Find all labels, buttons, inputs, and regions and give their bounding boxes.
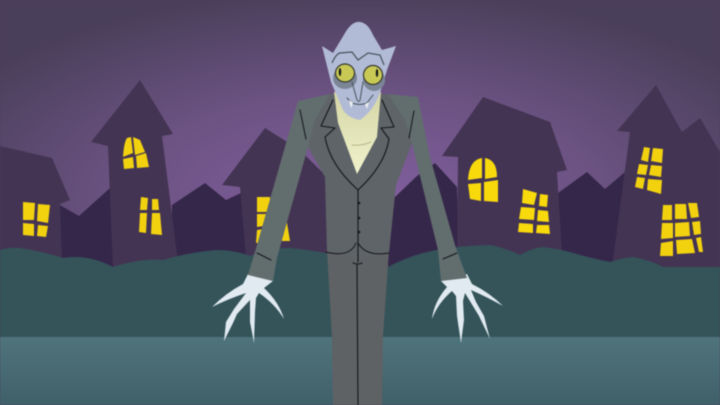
window: tower lower xyxy=(139,197,162,235)
house: behind left arm xyxy=(222,128,330,270)
house: far left xyxy=(0,146,70,262)
left hand xyxy=(212,274,284,343)
window: partly hidden xyxy=(256,197,290,243)
left arm xyxy=(248,94,330,281)
hedge row xyxy=(0,245,720,340)
ground xyxy=(0,337,720,405)
house: right centre xyxy=(442,97,567,270)
legs and trousers xyxy=(327,250,389,405)
window: left house xyxy=(23,202,50,237)
right hand xyxy=(432,274,503,343)
window: crooked panes xyxy=(518,189,550,234)
right eye xyxy=(364,66,382,84)
window: lower tower xyxy=(660,203,703,256)
right arm xyxy=(388,94,467,281)
house: tall tower xyxy=(91,80,179,270)
house: far right tower xyxy=(611,85,720,275)
head shape and ears xyxy=(322,22,396,120)
brow line xyxy=(332,52,384,65)
vampire figure xyxy=(212,22,503,405)
head xyxy=(322,22,396,120)
window: upper tower xyxy=(635,147,663,194)
left eye xyxy=(336,64,354,82)
background rooftops xyxy=(58,163,720,275)
window: tower arched xyxy=(123,137,149,169)
suit line work xyxy=(257,100,457,405)
jacket xyxy=(308,94,412,258)
window: arched xyxy=(468,158,498,202)
eye shadows xyxy=(333,67,357,89)
shirt xyxy=(334,92,381,174)
fangs xyxy=(349,100,369,109)
nose and mouth xyxy=(347,82,373,104)
suit buttons xyxy=(358,202,360,233)
